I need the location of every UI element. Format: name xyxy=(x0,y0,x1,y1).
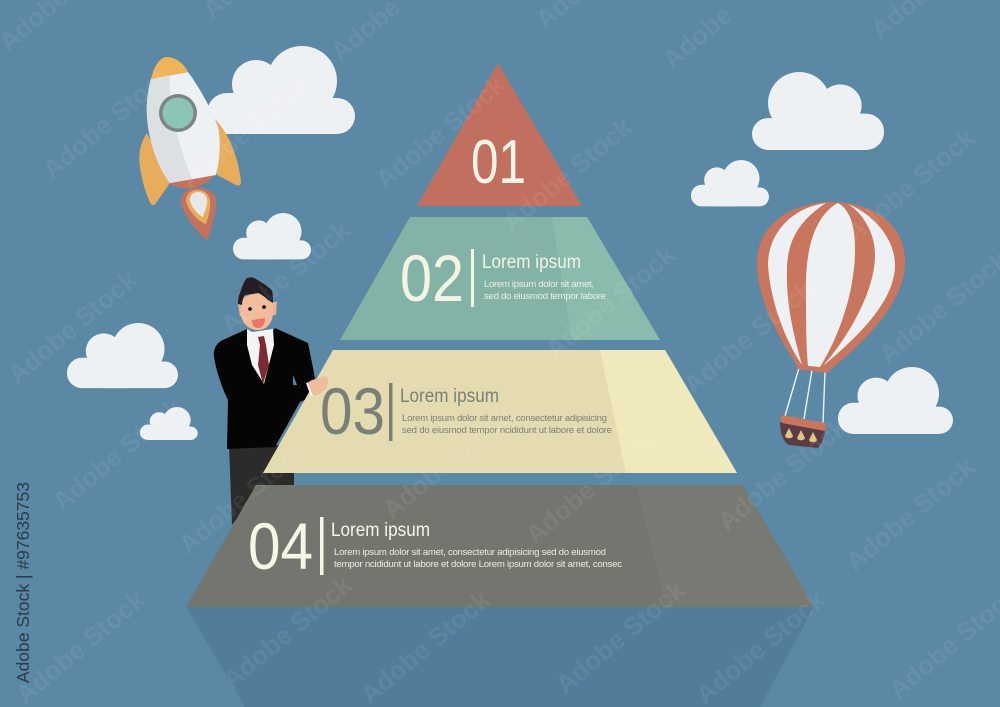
ropes xyxy=(785,368,825,423)
tier 4 body text: Lorem ipsum dolor sit amet, consectetur adipisicing sed do eiusmod xyxy=(334,547,606,558)
pyramid tier 1 xyxy=(417,63,582,206)
ears xyxy=(238,302,277,316)
watermarks: Adobe Stock xyxy=(550,574,691,700)
watermarks: Adobe Stock xyxy=(173,434,314,560)
watermarks: Adobe Stock xyxy=(47,391,188,517)
tier 3 body xyxy=(263,350,737,473)
collar xyxy=(796,364,830,373)
tier 2 body text: sed do eiusmod tempor labore xyxy=(484,291,606,302)
cloud: lower right xyxy=(838,367,953,434)
cloud: right small xyxy=(691,160,769,206)
watermarks: Adobe Stock xyxy=(690,584,831,707)
basket rim xyxy=(780,415,826,431)
basket tassels xyxy=(785,428,817,442)
watermarks: Adobe xyxy=(657,0,738,75)
engine base xyxy=(170,173,216,188)
tier 4 divider xyxy=(320,517,324,575)
cloud: left small xyxy=(140,407,198,440)
mouth xyxy=(252,318,265,328)
cloud: behind rocket xyxy=(207,46,355,134)
watermarks: Adobe Stock xyxy=(10,584,151,707)
businessman xyxy=(214,277,315,525)
tier 3 body text: Lorem ipsum dolor sit amet, consectetur adipisicing xyxy=(402,413,607,424)
tier 3 heading: Lorem ipsum xyxy=(400,385,499,407)
cloud: below rocket xyxy=(233,213,311,259)
tie xyxy=(258,336,269,384)
watermarks: Adobe Stock xyxy=(215,214,356,340)
rocket body shade xyxy=(147,75,192,183)
watermarks: Adobe Stock xyxy=(370,69,511,195)
pyramid tier 4 xyxy=(186,485,814,607)
flame inner xyxy=(190,192,207,217)
watermarks: Adobe Stock xyxy=(840,122,981,248)
jacket xyxy=(214,328,315,449)
clouds xyxy=(67,46,953,440)
tier 4 number: 04 xyxy=(248,509,313,583)
tier 2 number: 02 xyxy=(400,241,464,315)
tier 2 heading: Lorem ipsum xyxy=(482,251,581,273)
right fin xyxy=(214,118,241,186)
tier 3 body text: sed do eiusmod tempor ncididunt ut labore et dolore xyxy=(402,425,612,436)
hand xyxy=(308,376,328,395)
watermarks: Adobe Stock xyxy=(355,584,496,707)
watermarks: Adobe Stock xyxy=(37,59,178,185)
tier 3 light facet xyxy=(600,350,737,473)
icon: hot air balloon xyxy=(757,202,905,448)
arm gap xyxy=(293,375,297,385)
eyes xyxy=(248,307,252,311)
tier 4 heading: Lorem ipsum xyxy=(331,519,430,541)
window xyxy=(159,94,197,132)
trousers xyxy=(229,445,294,525)
watermarks: Adobe Stock xyxy=(217,569,358,695)
left fin xyxy=(139,133,170,205)
icon: rocket xyxy=(139,57,241,241)
envelope xyxy=(757,202,905,370)
hair xyxy=(238,277,273,305)
watermarks: Adobe Stock xyxy=(520,424,661,550)
tier 2 body text: Lorem ipsum dolor sit amet, xyxy=(484,279,594,290)
white stripes xyxy=(768,203,895,367)
tier 4 body text: tempor ncididunt ut labore et dolore Lorem ipsum dolor sit amet, consec xyxy=(334,559,622,570)
face xyxy=(241,292,273,330)
tier 2 divider xyxy=(471,249,474,307)
shirt cuff xyxy=(306,382,313,397)
pyramid reflection shadow xyxy=(186,607,814,707)
tier 3 number: 03 xyxy=(320,374,385,448)
shirt xyxy=(247,329,274,384)
tier 2 light facet xyxy=(552,217,660,340)
watermarks: Adobe Stock xyxy=(540,239,681,365)
pyramid tier 3 xyxy=(263,350,737,473)
watermarks: Adobe Stock xyxy=(175,69,316,195)
watermarks: Adobe Stock xyxy=(2,264,143,390)
tier 2 body xyxy=(340,217,660,340)
cloud: left middle xyxy=(67,323,178,388)
businessman hand and cuff xyxy=(306,376,328,397)
rocket body xyxy=(147,72,220,183)
flame middle xyxy=(186,190,210,224)
tier 4 body xyxy=(186,485,814,607)
tier 4 light facet xyxy=(636,485,814,607)
pyramid tier 2 xyxy=(340,217,660,340)
flame outer xyxy=(181,188,216,241)
watermarks: Adobe Stock xyxy=(712,411,853,537)
nose cone xyxy=(151,57,188,79)
stock image id: Adobe Stock | #97635753 xyxy=(13,482,33,683)
tier 3 divider xyxy=(389,383,392,441)
basket xyxy=(780,422,825,448)
cloud: top right xyxy=(752,72,884,150)
watermarks: Adobe Stock xyxy=(377,399,518,525)
tier 1 body xyxy=(417,63,582,206)
watermarks: Adobe Stock xyxy=(840,451,981,577)
watermarks: Adobe Stock xyxy=(497,111,638,237)
tier 1 number: 01 xyxy=(471,128,526,197)
watermarks: Adobe Stock xyxy=(678,274,819,400)
